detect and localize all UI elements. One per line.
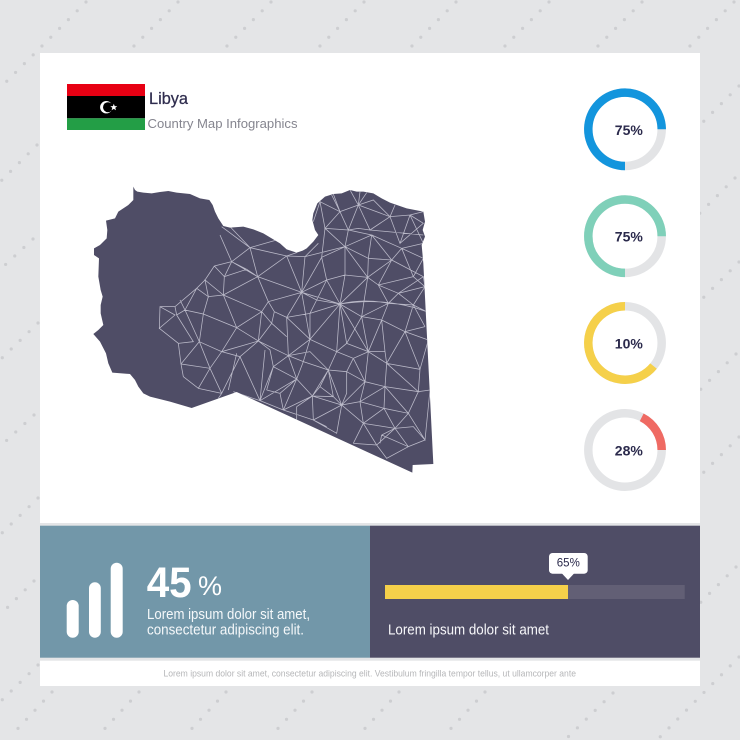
text block: statistic description: Lorem ipsum dolor sit amet,	[147, 607, 310, 623]
panel: main white card	[40, 53, 700, 523]
donut chart: 10% yellow: 10%	[615, 336, 643, 352]
donut chart: 28% red: 28%	[615, 443, 643, 459]
panel: dark progress	[370, 526, 700, 658]
panel: blue statistic	[40, 526, 370, 658]
map: Libya with mesh overlay	[93, 187, 433, 473]
text block: statistic description: consectetur adipiscing elit.	[147, 622, 304, 638]
icon: signal bars	[67, 563, 123, 638]
donut chart: 75% blue	[588, 93, 662, 166]
callout: 65 percent tooltip: 65%	[557, 558, 580, 570]
statistic: 45 percent: %	[198, 571, 222, 601]
text block: statistic description	[147, 607, 310, 638]
progress bar: 65 percent	[385, 585, 685, 599]
donut chart: 75% blue: 75%	[615, 122, 643, 138]
icon: Libya flag	[67, 84, 145, 130]
statistic: 45 percent: 45	[147, 559, 192, 607]
subtitle: Country Map Infographics	[148, 116, 298, 131]
callout: 65 percent tooltip	[549, 553, 588, 580]
donut chart: 10% yellow	[588, 306, 662, 380]
donut chart: 75% teal	[588, 199, 662, 273]
footer text: Lorem ipsum dolor sit amet, consectetur adipiscing elit. Vestibulum fringilla tempor tellus, ut ullamcorper ante	[164, 669, 576, 679]
heading: country name: Libya	[149, 89, 189, 108]
text block: progress label: Lorem ipsum dolor sit amet	[388, 622, 549, 638]
panel: footer strip	[40, 661, 700, 686]
donut chart: 75% teal: 75%	[615, 229, 643, 245]
statistic: 45 percent	[147, 559, 222, 607]
donut chart: 28% red	[588, 413, 662, 487]
